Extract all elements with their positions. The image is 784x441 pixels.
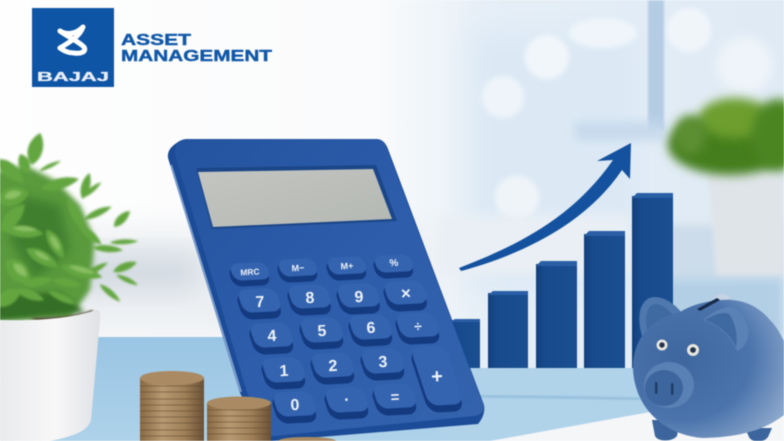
key M- [275,258,320,283]
growth arrow [459,143,631,271]
right plant, blurred [668,98,784,275]
logo: Bajaj Asset Management [32,8,273,87]
key equals [370,383,419,416]
key 1: 1 [279,363,289,380]
key plus: + [431,366,443,388]
feet [652,420,772,441]
key percent [371,254,416,279]
key M+: M+ [340,261,354,271]
body [633,300,784,438]
pot [0,310,100,441]
bar chart [450,193,673,368]
bar 2 [488,291,528,368]
keypad [227,254,465,424]
near ear [703,307,748,351]
key percent: % [389,258,399,269]
key equals: = [390,389,400,406]
key divide: ÷ [414,318,423,334]
key M+ [324,256,369,281]
calculator face [175,139,484,436]
snout [644,362,694,408]
logo square: BAJAJ [37,69,109,84]
display [196,165,397,229]
logo wordmark: ASSET [121,32,192,49]
front coin [278,437,336,441]
coin in slot [713,294,730,304]
logo wordmark [121,32,273,65]
key 1 [259,357,308,390]
key decimal: · [344,392,350,409]
slot [697,298,720,311]
key multiply [381,280,430,312]
key 9 [334,283,383,315]
key plus [408,346,465,413]
stack 2 [207,396,271,441]
foliage [0,131,139,322]
bar 5 [632,193,673,368]
key 9: 9 [354,289,364,306]
key 6: 6 [366,320,376,337]
key 3 [358,348,407,381]
calculator [168,139,484,441]
eyes [656,340,699,356]
key 5 [297,317,346,350]
key 6 [346,314,395,347]
logo square [32,8,114,87]
soil [30,310,96,322]
far ear [639,297,682,336]
coin stacks [140,371,336,441]
bar 1 [450,319,480,368]
key 5: 5 [317,323,327,340]
key MRC [227,262,272,287]
bar 3 [536,261,577,368]
stack 1 [140,371,204,441]
key divide [393,312,442,345]
piggy bank [633,294,784,441]
bar 4 [584,231,625,368]
key 2: 2 [328,358,338,375]
table surface [0,278,784,441]
key 7 [235,288,284,320]
key MRC: MRC [240,267,260,278]
calculator body side [168,139,484,441]
key 8 [285,284,334,316]
key 7: 7 [255,294,265,311]
key 4: 4 [267,328,277,345]
key 3: 3 [378,354,388,371]
left plant [0,131,139,441]
logo wordmark: MANAGEMENT [121,48,273,65]
key 2 [308,352,357,385]
key decimal [322,387,371,420]
key multiply: × [400,284,411,303]
key 0: 0 [290,397,300,414]
key 4 [247,322,296,355]
key 8: 8 [305,290,315,307]
left edge highlight [171,165,241,392]
key 0 [270,391,319,424]
key M-: M− [291,263,305,273]
